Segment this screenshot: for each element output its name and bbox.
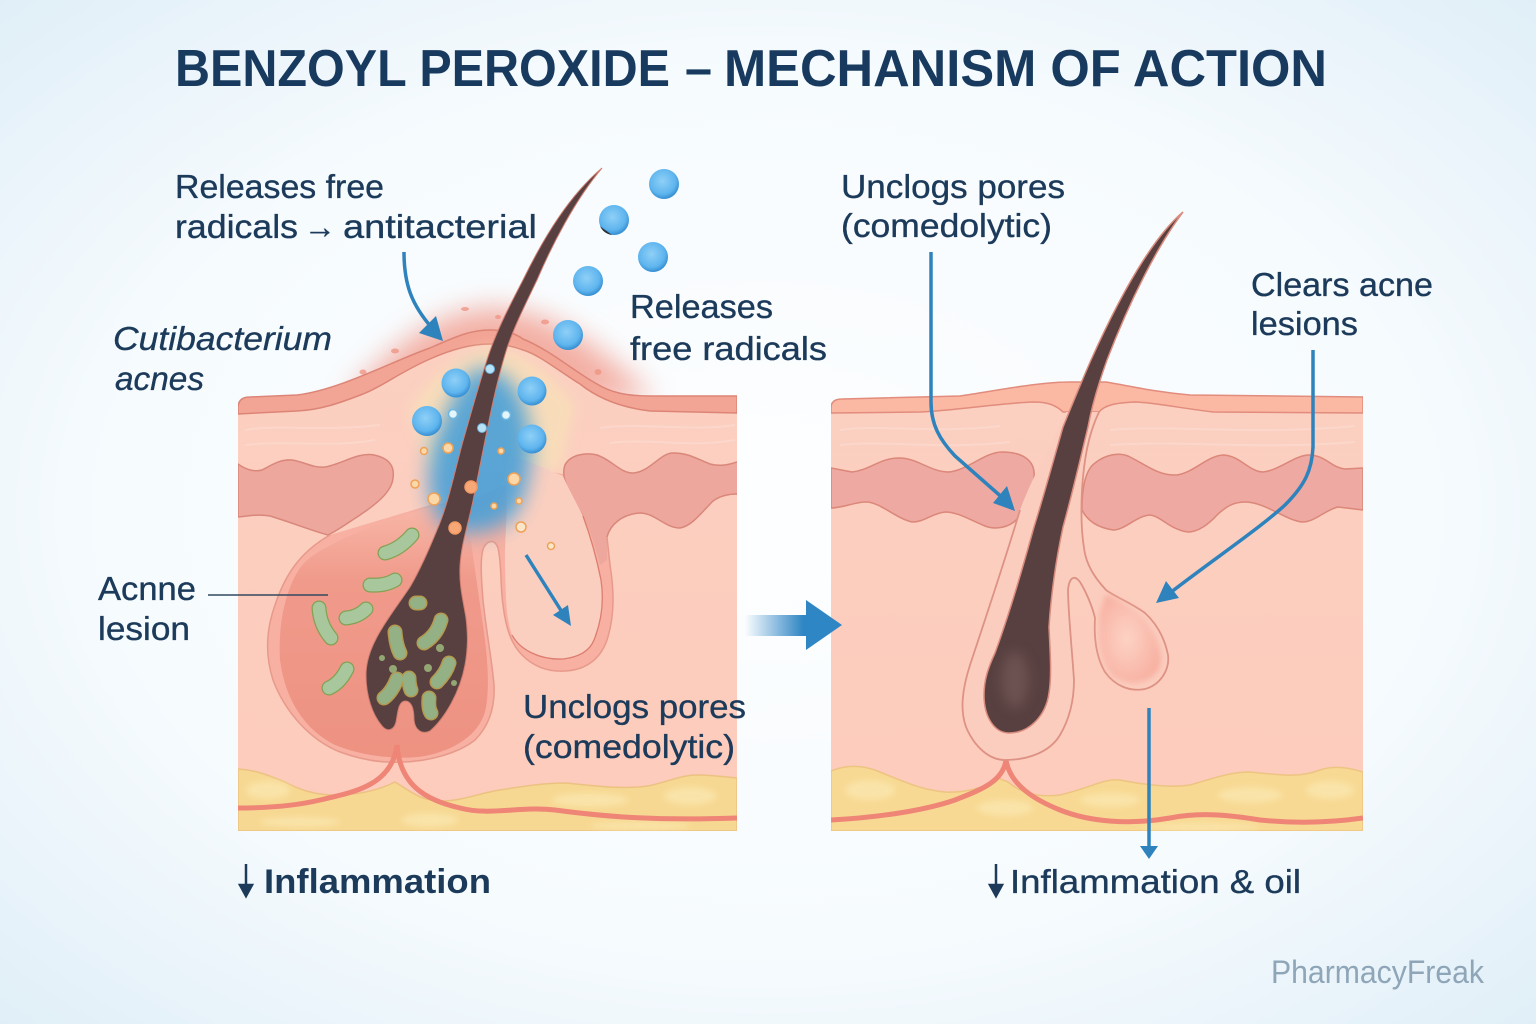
label: releases free radicals antibacterial: antitacterial [343,208,537,245]
subcutaneous fat [238,769,737,831]
dermal band left [238,455,393,535]
label: releases free radicals: free radicals [630,330,827,367]
follicle outline [963,412,1168,760]
label: unclogs pores right [841,168,1065,244]
subcutaneous fat [831,766,1363,831]
follicle and sebaceous gland fill [963,412,1168,760]
arrow: bacteria target [404,252,443,341]
label: clears acne lesions: lesions [1251,305,1358,342]
bulb sheen [1001,652,1029,708]
arrow: treatment transition [745,600,842,650]
label: unclogs pores right: Unclogs pores [841,168,1065,205]
label: unclogs pores left: (comedolytic) [523,728,735,765]
label: Cutibacterium acnes: Cutibacterium [113,320,332,357]
free radical bubbles above skin [553,169,679,350]
label: releases free radicals antibacterial [175,168,537,245]
inflammation glow [345,308,655,400]
healthy dermis [831,402,1363,795]
leader line: acne lesion [208,594,328,596]
label: Cutibacterium acnes: acnes [115,360,204,397]
arrow: clears acne lesions [1156,350,1313,603]
arrow: reduced inflammation and oil [1140,708,1158,859]
arrow: unclogs pores right [931,252,1015,511]
gland inner line [512,516,602,659]
label: releases free radicals antibacterial: → [304,208,336,245]
orange debris particles [411,443,554,550]
hair with clogged bulb [366,168,602,732]
cream area under bump [410,348,575,470]
label: unclogs pores left: Unclogs pores [523,688,746,725]
blood vessel [238,745,737,819]
label: releases free radicals [630,288,827,367]
arrow: unclog pores left [526,555,571,626]
sebaceous gland interior [505,466,602,658]
hair with root bulb [984,212,1183,733]
blood vessel [831,760,1363,822]
title: – [685,40,712,98]
title [175,40,1327,98]
label: reduced inflammation and oil: Inflammation & oil [1010,863,1301,900]
skin dermis [238,330,737,831]
title: MECHANISM OF ACTION [724,40,1327,98]
fat cell highlights [246,781,716,830]
label: clears acne lesions [1251,266,1433,342]
panel: cleared skin cross-section [831,212,1363,831]
label: acne lesion [98,570,196,647]
dermal band right [1082,454,1363,532]
label: releases free radicals: Releases [630,288,773,325]
fat cell highlights [845,780,1354,831]
dermal band left [831,452,1034,528]
label: unclogs pores left [523,688,746,765]
label: acne lesion: Acnne [98,570,196,607]
dermal band right outline [564,453,737,537]
dermis fine lines [840,426,1355,445]
blue antibacterial haze [429,369,531,533]
dermal band right [564,453,737,565]
title: BENZOYL PEROXIDE [175,40,670,98]
epidermis [831,382,1363,413]
label: releases free radicals antibacterial: Releases free [175,168,384,205]
lesion inner inflamed area [280,543,488,758]
label: acne lesion: lesion [98,610,190,647]
label: Cutibacterium acnes [113,320,332,397]
bacteria: Cutibacterium acnes [319,535,457,713]
lesion outer outline [268,535,613,762]
bubble cluster in pore [412,364,546,454]
lesion and gland wall fill [268,470,613,762]
glow speckles [360,307,602,375]
label: unclogs pores right: (comedolytic) [841,207,1052,244]
label: clears acne lesions: Clears acne [1251,266,1433,303]
watermark: PharmacyFreak [1271,954,1485,990]
dermis fine lines [245,425,735,445]
epidermis layer [238,330,737,414]
gland highlight [1099,594,1161,683]
panel: acne lesion skin cross-section [238,168,737,831]
label: releases free radicals antibacterial: radicals [175,208,298,245]
label: reduced inflammation: Inflammation [264,863,491,901]
